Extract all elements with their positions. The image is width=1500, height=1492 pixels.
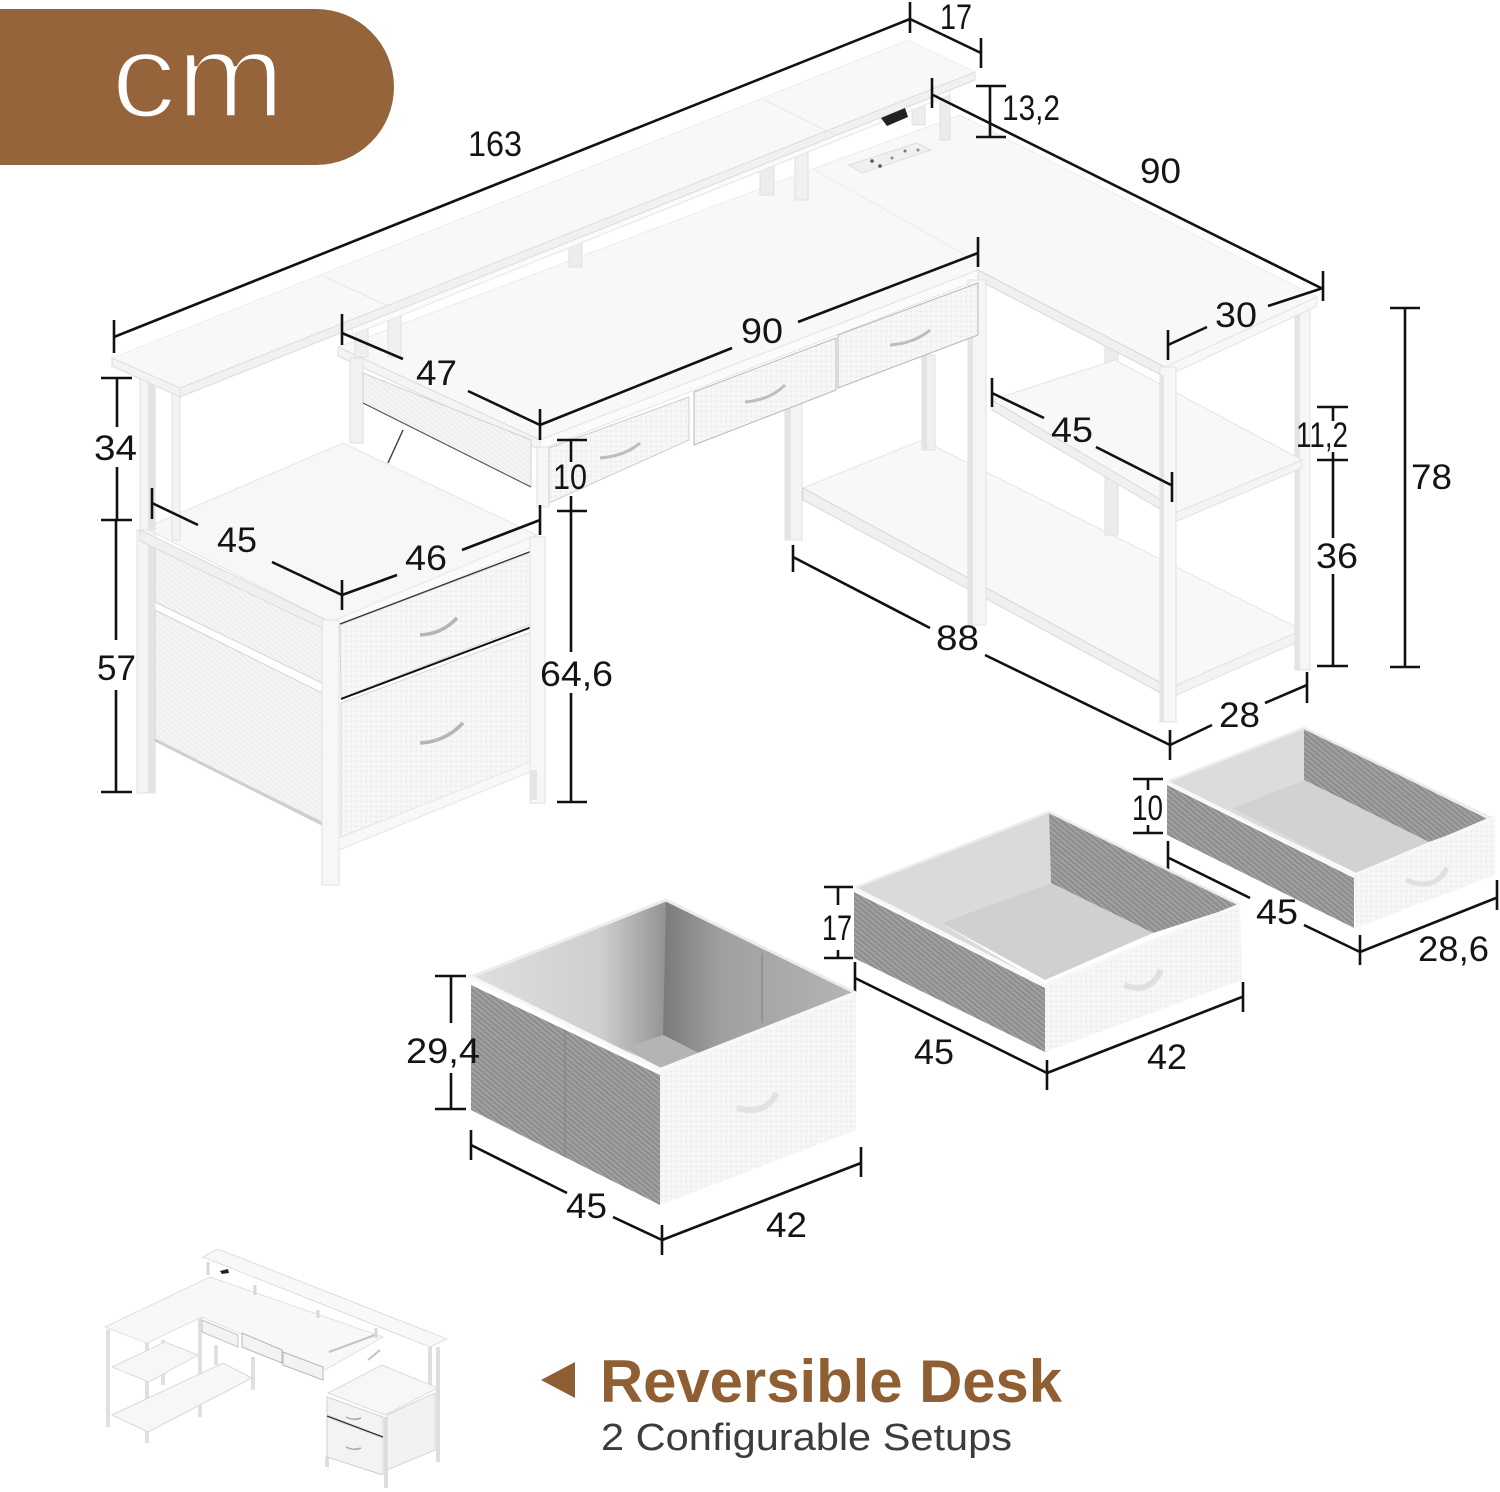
large drawer dimensions: 29,4, 45, 42 xyxy=(406,976,861,1255)
dimension: 28 xyxy=(1170,672,1307,745)
dimension: 90 front: 90 xyxy=(741,312,783,351)
dimension: 28: 28 xyxy=(1219,696,1260,735)
small drawer dimensions: 10, 45, 28,6 xyxy=(1132,779,1497,969)
dimension: 11,2: 11,2 xyxy=(1296,416,1348,455)
dimension: 47: 47 xyxy=(416,354,457,393)
upper side shelf xyxy=(992,360,1302,524)
dimension: 88 xyxy=(793,545,1170,760)
dimension: 30: 30 xyxy=(1215,296,1257,335)
cabinet side fabric panels xyxy=(155,545,322,824)
desk front legs xyxy=(350,280,1176,722)
large drawer xyxy=(471,900,856,1205)
dimension: 78 xyxy=(1390,308,1452,667)
small drawer dimensions: 10, 45, 28,6: 28,6 xyxy=(1418,930,1489,969)
medium drawer dimensions: 17, 45, 42: 42 xyxy=(1147,1038,1187,1077)
dimension: 90 side xyxy=(932,78,1323,301)
cabinet frame legs xyxy=(322,537,545,885)
hutch lower strip xyxy=(352,88,950,335)
dimension: 47 xyxy=(342,314,540,425)
dimension: 78: 78 xyxy=(1411,458,1452,497)
medium drawer dimensions: 17, 45, 42: 45 xyxy=(914,1033,954,1072)
L-shaped desktop xyxy=(338,115,1317,450)
cabinet top xyxy=(140,443,537,632)
unit badge: cm xyxy=(0,9,394,165)
dimension: 13,2: 13,2 xyxy=(1002,89,1060,128)
medium drawer xyxy=(854,812,1242,1052)
dimension: 36: 36 xyxy=(1316,537,1358,576)
dimension: 10 desk drawer xyxy=(553,440,587,511)
dimension: 88: 88 xyxy=(936,619,979,658)
dimension: 45 shelf: 45 xyxy=(1051,411,1093,450)
cabinet drawers xyxy=(340,549,537,837)
hutch USB port xyxy=(881,108,908,126)
dimension: 36 xyxy=(1316,460,1358,666)
main L-shaped desk illustration xyxy=(112,40,1317,885)
subheading: 2 Configurable Setups: 2 Configurable Setups xyxy=(601,1417,1012,1459)
arrow: reversible direction xyxy=(541,1362,575,1398)
heading: Reversible Desk: Reversible Desk xyxy=(600,1348,1063,1415)
dimension: 30 xyxy=(1168,288,1323,360)
small drawer xyxy=(1167,728,1495,928)
rear legs of desk xyxy=(785,308,1310,670)
dimension: 45 shelf xyxy=(992,378,1172,502)
dimension: 64,6 xyxy=(540,511,613,802)
dimension: 11,2 xyxy=(1296,407,1348,460)
large drawer dimensions: 29,4, 45, 42: 29,4 xyxy=(406,1032,480,1071)
dimension: 57: 57 xyxy=(97,649,136,688)
file cabinet xyxy=(137,443,545,885)
hutch risers xyxy=(140,93,950,540)
dimension: 46 xyxy=(342,505,540,595)
large drawer dimensions: 29,4, 45, 42: 45 xyxy=(566,1187,607,1226)
dimension: 64,6: 64,6 xyxy=(540,655,613,694)
small drawer dimensions: 10, 45, 28,6: 45 xyxy=(1256,893,1298,932)
medium drawer dimensions: 17, 45, 42 xyxy=(822,887,1243,1090)
hutch top shelf xyxy=(112,40,975,397)
dimension: 17 xyxy=(910,0,981,68)
cabinet left leg xyxy=(137,530,155,793)
dimension: 10 desk drawer: 10 xyxy=(553,458,587,497)
dimension: 45 cabinet depth xyxy=(152,488,342,610)
power socket strip xyxy=(849,143,931,173)
three desk drawers xyxy=(549,283,978,503)
lower long shelf xyxy=(803,440,1302,698)
large drawer dimensions: 29,4, 45, 42: 42 xyxy=(766,1206,807,1245)
small reversed desk thumbnail xyxy=(105,1249,447,1488)
unit badge: cm: cm xyxy=(111,9,285,143)
dimension: 57 xyxy=(97,520,136,792)
dimension: 163: 163 xyxy=(468,125,522,164)
small drawer dimensions: 10, 45, 28,6: 10 xyxy=(1132,789,1163,828)
dimension: 34 xyxy=(94,378,137,520)
side fabric modesty panel and cable xyxy=(363,373,531,487)
dimension: 13,2 xyxy=(976,86,1060,137)
medium drawer dimensions: 17, 45, 42: 17 xyxy=(822,909,852,948)
dimension: 34: 34 xyxy=(94,429,137,468)
dimension: 163 xyxy=(114,2,910,353)
dimension: 45 cabinet depth: 45 xyxy=(217,521,257,560)
dimension: 90 side: 90 xyxy=(1140,152,1181,191)
dimension: 90 front xyxy=(540,237,978,440)
dimension: 46: 46 xyxy=(405,539,447,578)
